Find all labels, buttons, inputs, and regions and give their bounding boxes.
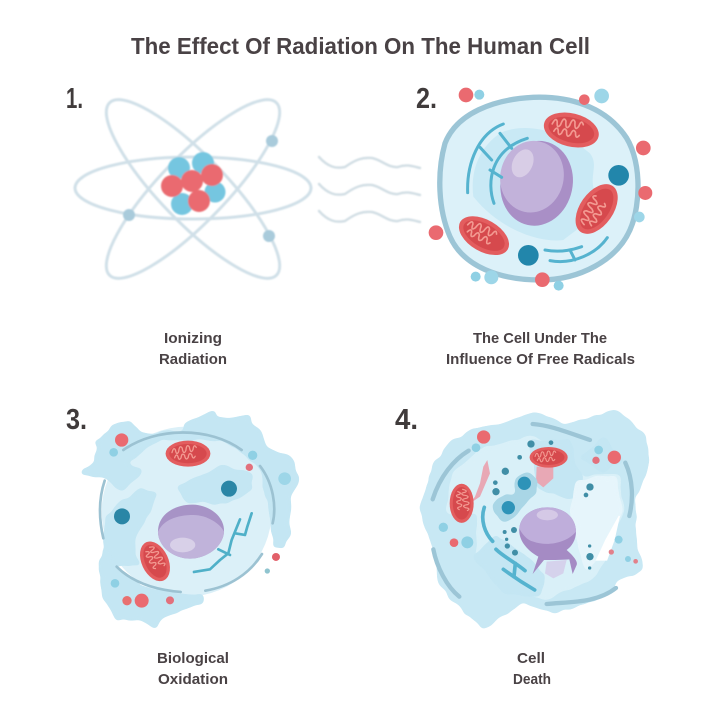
- label: biological oxidation: Oxidation: [158, 671, 228, 688]
- label: biological oxidation: [157, 650, 229, 688]
- step number 3: 3.: [66, 404, 87, 436]
- vesicle clouds: [492, 471, 538, 523]
- arrow: radiation waves: [319, 157, 420, 222]
- label: cell under free radicals: Influence Of Free Radicals: [446, 351, 635, 368]
- membrane fragments: [100, 432, 274, 592]
- nucleus: [519, 507, 577, 578]
- lighter interior patches: [447, 437, 623, 600]
- panel: biological oxidation: [66, 404, 301, 688]
- free radicals: [439, 430, 638, 564]
- label: cell death: Death: [513, 671, 551, 688]
- pale right patch: [570, 475, 622, 573]
- panel: ionizing radiation: [66, 80, 311, 368]
- nucleus: [158, 505, 224, 559]
- endoplasmic reticulum: [194, 513, 252, 572]
- free radicals: [109, 433, 291, 608]
- label: ionizing radiation: Ionizing: [164, 330, 222, 347]
- label: cell under free radicals: [446, 330, 635, 368]
- label: cell death: [513, 650, 551, 688]
- icon: damaged cell: [82, 410, 301, 630]
- broken organelles: [470, 460, 490, 503]
- cytoplasm patch: [473, 128, 597, 240]
- cell body: [440, 97, 638, 280]
- cell debris cloud: [420, 410, 650, 630]
- icon: dying cell: [420, 410, 650, 630]
- label: ionizing radiation: [159, 330, 227, 368]
- vesicles: [608, 165, 629, 186]
- step number 1: 1.: [66, 83, 83, 115]
- debris dots: [492, 440, 594, 570]
- electrons: [123, 135, 278, 242]
- membrane fragments: [433, 424, 632, 604]
- leaking cytoplasm: [82, 410, 301, 630]
- cell interior: [102, 427, 272, 597]
- label: biological oxidation: Biological: [157, 650, 229, 667]
- free radicals: [429, 88, 652, 291]
- nucleus: [161, 152, 226, 215]
- icon: atom: [75, 80, 311, 298]
- vesicles: [221, 481, 237, 497]
- membrane tear: [597, 516, 619, 560]
- label: cell death: Cell: [517, 650, 545, 667]
- title: The Effect Of Radiation On The Human Cell: [131, 33, 590, 59]
- mitochondria: [166, 441, 210, 467]
- step number 2: 2.: [416, 83, 437, 115]
- nucleus: [493, 134, 581, 233]
- panel: cell death: [395, 404, 650, 688]
- endoplasmic reticulum: [468, 124, 607, 262]
- label: cell under free radicals: The Cell Under The: [473, 330, 607, 347]
- endoplasmic reticulum fragments: [483, 507, 535, 590]
- darker interior patches: [473, 437, 623, 597]
- label: ionizing radiation: Radiation: [159, 351, 227, 368]
- mitochondria: [540, 107, 603, 153]
- mitochondria: [450, 484, 474, 523]
- step number 4: 4.: [395, 404, 418, 436]
- icon: intact cell: [429, 88, 652, 291]
- vesicles: [518, 477, 531, 490]
- atom orbits: [75, 80, 311, 298]
- panel: cell under free radicals: [416, 83, 652, 368]
